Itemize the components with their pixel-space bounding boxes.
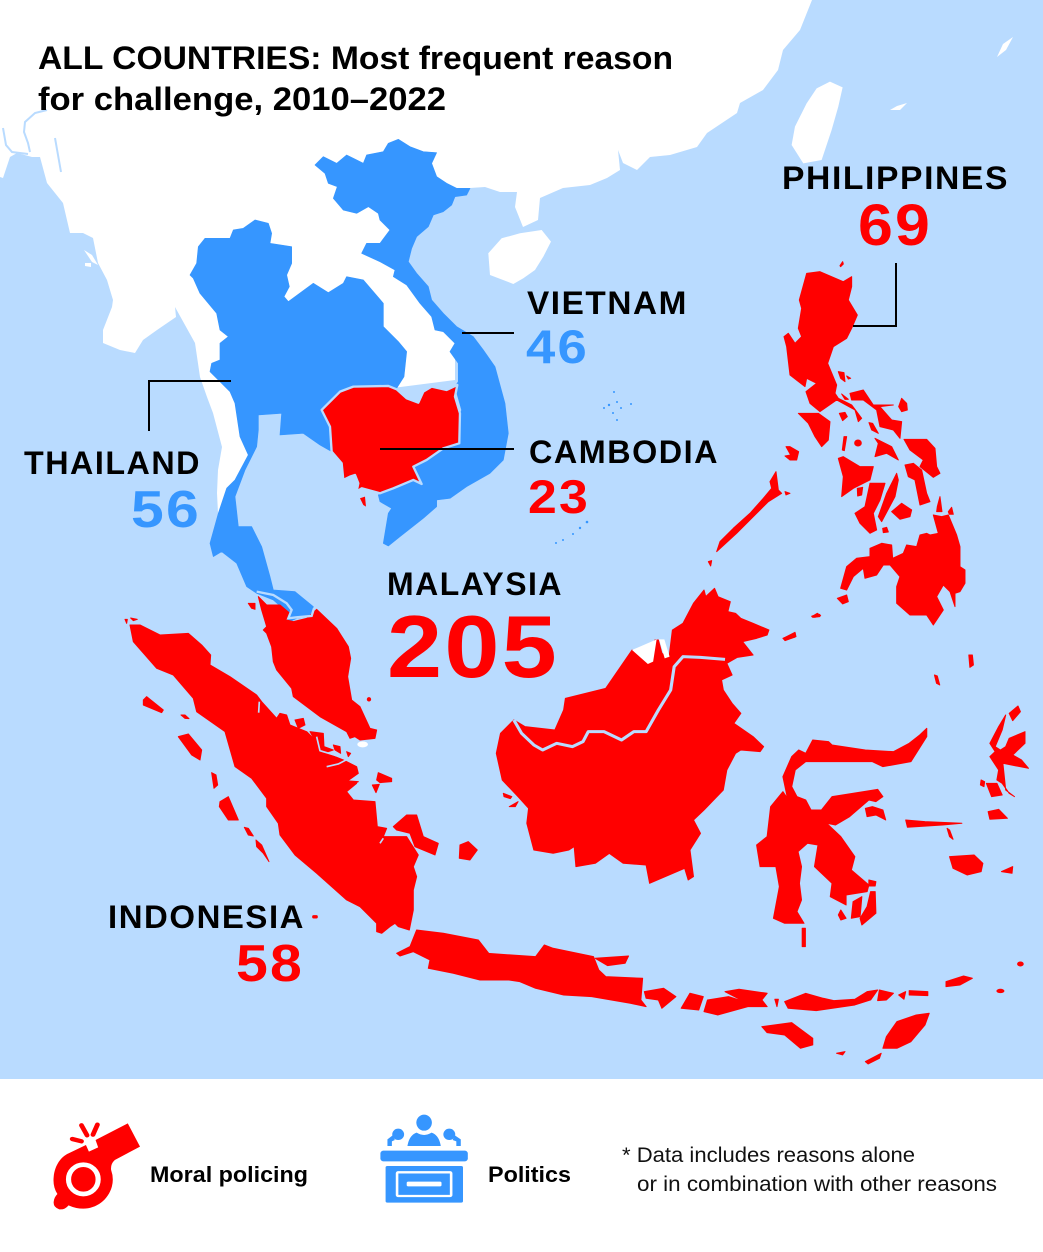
country: Malaysia and Indonesia west <box>125 597 527 980</box>
label: Cambodia 23 <box>528 434 719 523</box>
land: mainland Asia <box>0 0 1013 513</box>
icon: whistle <box>53 1123 140 1209</box>
Java west <box>397 930 527 980</box>
country: Philippines <box>708 262 965 641</box>
Sumatra <box>130 625 418 933</box>
label: Philippines 69: PHILIPPINES <box>782 160 1009 196</box>
footnote <box>622 1144 997 1196</box>
Sumatra offshore islands <box>125 603 477 918</box>
Thai-Malay border line <box>257 592 314 618</box>
label: Thailand 56: THAILAND <box>24 445 201 481</box>
label: Indonesia 58: 58 <box>236 935 304 993</box>
label: Thailand 56 <box>24 445 201 539</box>
label: Malaysia 205: 205 <box>387 597 559 696</box>
rivers and delta <box>3 110 61 172</box>
Borneo border <box>514 657 725 750</box>
Borneo <box>496 588 769 883</box>
label: Indonesia 58 <box>108 899 305 993</box>
label: Cambodia 23: 23 <box>528 470 590 523</box>
legend <box>53 1115 997 1209</box>
label: Indonesia 58: INDONESIA <box>108 899 305 935</box>
label: Malaysia 205: MALAYSIA <box>387 566 563 602</box>
label: Vietnam 46 <box>526 285 688 373</box>
Visayas, Mindoro, Palawan <box>708 262 953 641</box>
country: Malaysia Borneo and Indonesian archipelago <box>486 588 1028 1064</box>
label lines <box>149 263 896 449</box>
label: Vietnam 46: VIETNAM <box>527 285 688 321</box>
label: Philippines 69 <box>782 160 1009 258</box>
country: Vietnam <box>315 139 508 546</box>
label: Thailand 56: 56 <box>131 481 201 539</box>
Java east and Lesser Sunda islands <box>486 793 1023 1064</box>
label: Politics: Politics <box>488 1162 571 1187</box>
label: Moral policing: Moral policing <box>150 1162 308 1187</box>
icon: politics podium <box>380 1115 468 1203</box>
Mindanao <box>841 515 965 625</box>
Sulawesi <box>757 728 927 923</box>
country: Thailand <box>190 220 407 623</box>
title: ALL COUNTRIES: Most frequent reason <box>38 40 673 76</box>
title: for challenge, 2010–2022 <box>38 81 446 117</box>
Singapore <box>357 741 368 747</box>
islands: Spratly and Paracel specks <box>555 391 632 544</box>
footnote: * Data includes reasons alone <box>622 1144 915 1167</box>
country: Cambodia <box>322 385 460 507</box>
label: Vietnam 46: 46 <box>526 320 589 373</box>
title <box>38 40 673 117</box>
label: Malaysia 205 <box>387 566 563 696</box>
Brunei <box>632 639 670 664</box>
Maluku and Sulawesi islets <box>783 614 1028 947</box>
Riau channels <box>259 702 383 843</box>
label: Philippines 69: 69 <box>858 193 932 258</box>
Peninsular Malaysia <box>258 597 377 740</box>
Luzon <box>784 272 862 422</box>
footnote: or in combination with other reasons <box>637 1173 997 1196</box>
label: Cambodia 23: CAMBODIA <box>529 434 719 470</box>
